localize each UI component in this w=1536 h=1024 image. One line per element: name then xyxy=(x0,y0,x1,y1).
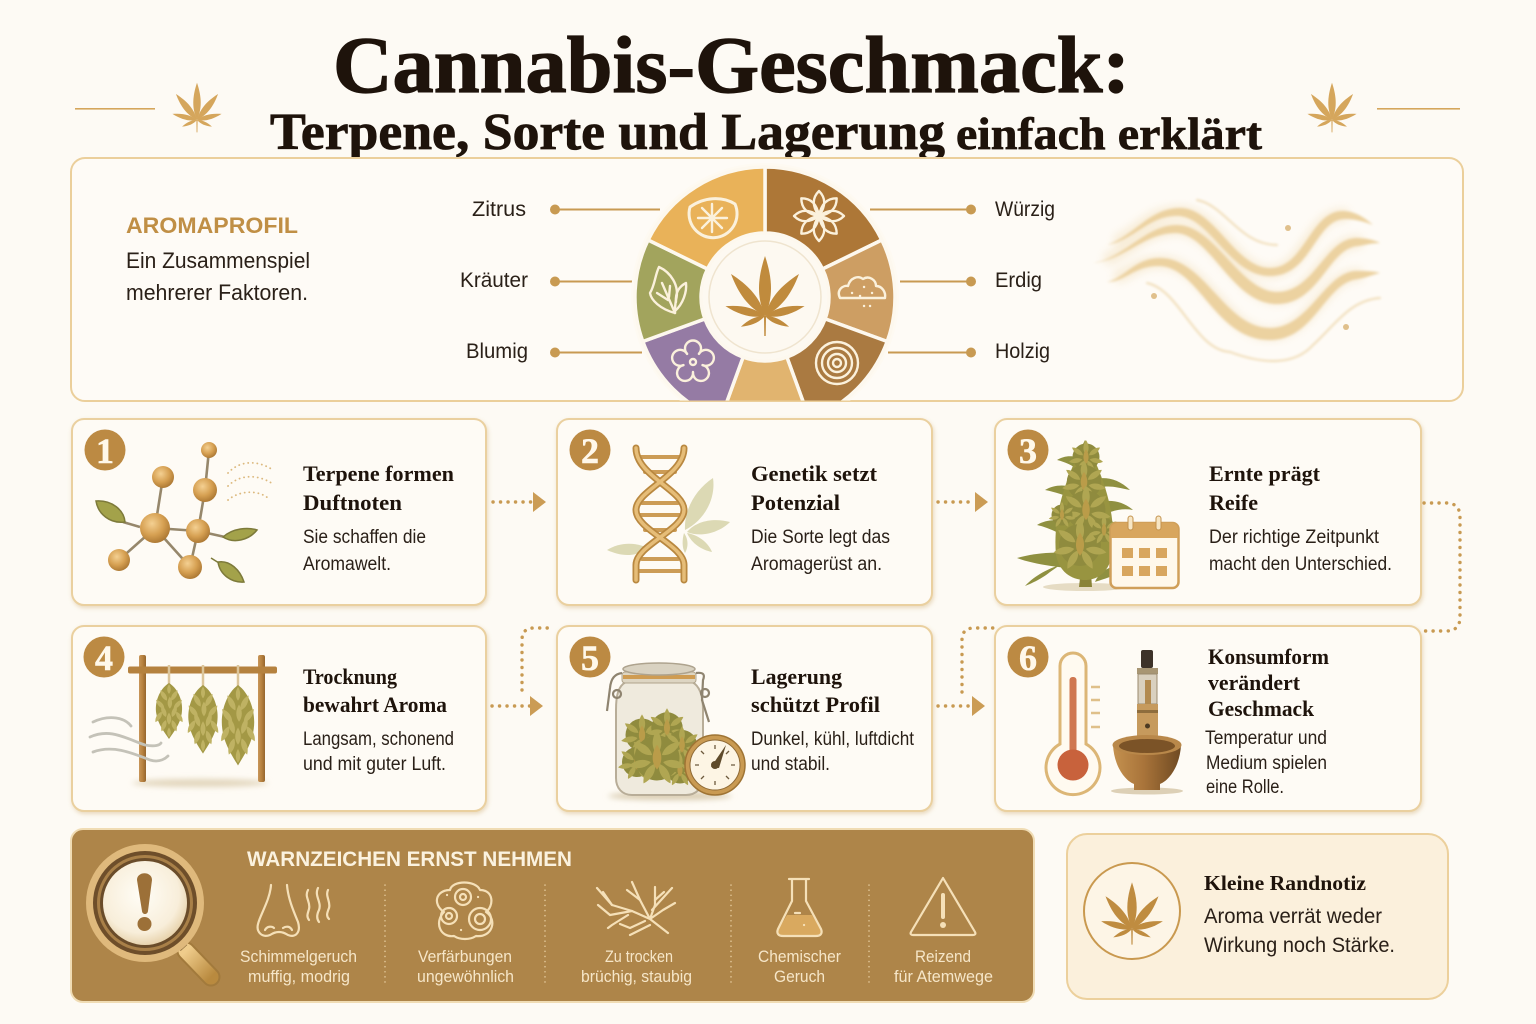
icon: flower xyxy=(672,340,714,381)
step 1 text xyxy=(303,461,454,575)
title xyxy=(270,22,1263,161)
step 3 text: Ernte prägt xyxy=(1209,461,1321,486)
number badge 3: 3 xyxy=(1019,431,1037,471)
arrow: step 1 to 2 xyxy=(493,492,546,512)
icon: vaporizer xyxy=(1137,650,1158,738)
number badge 4: 4 xyxy=(95,638,113,678)
smoke waves xyxy=(1093,200,1380,361)
warning: Zu trocken xyxy=(581,882,692,986)
connector: Kräuter xyxy=(550,277,632,286)
note text: Kleine Randnotiz xyxy=(1204,871,1366,895)
number badge 5: 5 xyxy=(581,638,599,678)
icon: terpene molecule xyxy=(96,442,273,582)
step 2 text: Potenzial xyxy=(751,490,840,515)
step 4 text: und mit guter Luft. xyxy=(303,754,446,775)
step 1 text: Sie schaffen die xyxy=(303,527,426,548)
icon: cannabis bud xyxy=(1017,440,1140,591)
warning: Chemischer Geruch xyxy=(758,879,841,986)
number badge 4 xyxy=(84,636,124,678)
warning: Reizend: Reizend xyxy=(915,947,971,966)
label: Zitrus: Zitrus xyxy=(472,198,526,221)
number badge 2: 2 xyxy=(581,431,599,471)
header ornament right xyxy=(1307,83,1460,132)
warning: Verfärbungen: ungewöhnlich xyxy=(417,967,514,986)
intro text: AROMAPROFIL xyxy=(126,213,298,238)
step 6 text: eine Rolle. xyxy=(1206,777,1284,798)
icon: storage jar xyxy=(607,663,732,800)
step 6 text: Medium spielen xyxy=(1206,753,1327,774)
step 2 text: Aromagerüst an. xyxy=(751,554,882,575)
icon: nose xyxy=(258,885,329,936)
icon: flask xyxy=(777,879,822,936)
step 3 text: Reife xyxy=(1209,490,1258,515)
warning: Zu trocken: brüchig, staubig xyxy=(581,967,692,986)
label: Kräuter: Kräuter xyxy=(460,269,528,292)
step 5 text: Lagerung xyxy=(751,664,842,689)
panel: step 3 xyxy=(995,419,1421,605)
number badge 6: 6 xyxy=(1019,638,1037,678)
header ornament left xyxy=(75,83,222,132)
note text: Wirkung noch Stärke. xyxy=(1204,934,1395,957)
number badge 3 xyxy=(1008,430,1048,471)
icon: thermometer xyxy=(1046,653,1100,795)
icon: leaf badge xyxy=(1084,863,1180,959)
step 3 text: Der richtige Zeitpunkt xyxy=(1209,527,1380,548)
arrow: step 3 to 6 xyxy=(1424,503,1460,631)
label: Holzig: Holzig xyxy=(995,340,1050,363)
icon: calendar xyxy=(1110,516,1178,588)
connector: Holzig xyxy=(888,348,976,357)
title: einfach erklärt xyxy=(956,108,1263,159)
step 1 text: Terpene formen xyxy=(303,461,454,486)
step 6 text: Temperatur und xyxy=(1205,728,1327,749)
icon: warning triangle xyxy=(911,878,975,935)
number badge 5 xyxy=(570,636,610,678)
step 4 text xyxy=(303,664,454,775)
connector: Blumig xyxy=(550,348,642,357)
number badge 6 xyxy=(1008,636,1048,678)
step 5 text: und stabil. xyxy=(751,754,830,775)
wheel center leaf xyxy=(724,256,806,336)
note text xyxy=(1204,871,1395,957)
label: Würzig: Würzig xyxy=(995,198,1055,221)
panel: side note xyxy=(1067,834,1448,999)
panel: warning signs xyxy=(71,829,1034,1002)
step 4 text: bewahrt Aroma xyxy=(303,692,447,717)
exclamation mark xyxy=(137,873,152,931)
panel: step 6 xyxy=(995,626,1421,811)
step 6 text: Geschmack xyxy=(1208,696,1315,721)
title: Cannabis-Geschmack: xyxy=(333,22,1130,110)
icon: earth mound xyxy=(839,277,885,306)
icon: star anise xyxy=(794,191,844,241)
connector: Würzig xyxy=(870,205,976,214)
step 5 text xyxy=(751,664,915,775)
intro text xyxy=(126,213,310,305)
step 6 text: verändert xyxy=(1208,670,1301,695)
warning: Schimmelgeruch xyxy=(240,885,357,986)
magnifier icon xyxy=(86,844,211,977)
panel: step 4 xyxy=(72,626,486,811)
warning: Verfärbungen xyxy=(417,882,514,986)
step 2 text xyxy=(751,461,890,575)
panel: step 2 xyxy=(557,419,932,605)
number badge 2 xyxy=(570,430,610,471)
icon: DNA helix with leaves xyxy=(607,448,730,580)
icon: dry branches xyxy=(597,882,675,935)
step 2 text: Die Sorte legt das xyxy=(751,527,890,548)
step 6 text xyxy=(1205,644,1329,798)
arrow: step 4 to 5 xyxy=(492,696,543,716)
icon: herb leaf xyxy=(650,267,686,313)
icon: mortar bowl xyxy=(1111,735,1183,794)
step 2 text: Genetik setzt xyxy=(751,461,878,486)
warning: Reizend: für Atemwege xyxy=(894,967,993,986)
warning: Zu trocken: Zu trocken xyxy=(605,947,673,966)
step 5 text: Dunkel, kühl, luftdicht xyxy=(751,729,915,750)
panel: step 5 xyxy=(557,626,932,811)
icon: gauge xyxy=(685,735,745,795)
warning: Chemischer Geruch: Chemischer xyxy=(758,947,841,966)
arrow: step 5 to 6 upper route xyxy=(962,628,993,692)
panel: step 1 xyxy=(72,419,486,605)
warning: Schimmelgeruch: muffig, modrig xyxy=(248,967,350,986)
number badge 1: 1 xyxy=(96,431,114,471)
intro text: Ein Zusammenspiel xyxy=(126,248,310,273)
number badge 1 xyxy=(84,430,126,471)
intro text: mehrerer Faktoren. xyxy=(126,280,308,305)
label: Erdig: Erdig xyxy=(995,269,1042,292)
step 4 text: Trocknung xyxy=(303,664,397,689)
panel: aromaprofil xyxy=(70,157,1464,402)
arrow: step 2 to 3 xyxy=(938,492,988,512)
title: Terpene, Sorte und Lagerung xyxy=(270,104,945,161)
step 5 text: schützt Profil xyxy=(751,692,880,717)
warning: Reizend xyxy=(894,878,993,986)
icon: wood rings xyxy=(816,342,858,384)
warning: Chemischer Geruch: Geruch xyxy=(774,967,825,986)
icon: drying rack xyxy=(90,655,277,787)
note text: Aroma verrät weder xyxy=(1204,905,1382,928)
icon: mold spots xyxy=(437,882,492,939)
step 1 text: Aromawelt. xyxy=(303,554,391,575)
connector: Erdig xyxy=(900,277,976,286)
step 4 text: Langsam, schonend xyxy=(303,729,454,750)
warning: Schimmelgeruch: Schimmelgeruch xyxy=(240,947,357,966)
step 3 text xyxy=(1209,461,1392,575)
icon: citrus xyxy=(689,199,737,238)
connector: Zitrus xyxy=(550,205,660,214)
label: Blumig: Blumig xyxy=(466,340,528,363)
step 6 text: Konsumform xyxy=(1208,644,1329,669)
warning: Verfärbungen: Verfärbungen xyxy=(418,947,512,966)
arrow: step 5 to 6 xyxy=(938,696,985,716)
warning heading: WARNZEICHEN ERNST NEHMEN xyxy=(247,848,572,871)
arrow: step 4 to 5 upper route xyxy=(522,628,552,690)
step 3 text: macht den Unterschied. xyxy=(1209,554,1392,575)
aroma wheel xyxy=(632,168,894,400)
step 1 text: Duftnoten xyxy=(303,490,402,515)
